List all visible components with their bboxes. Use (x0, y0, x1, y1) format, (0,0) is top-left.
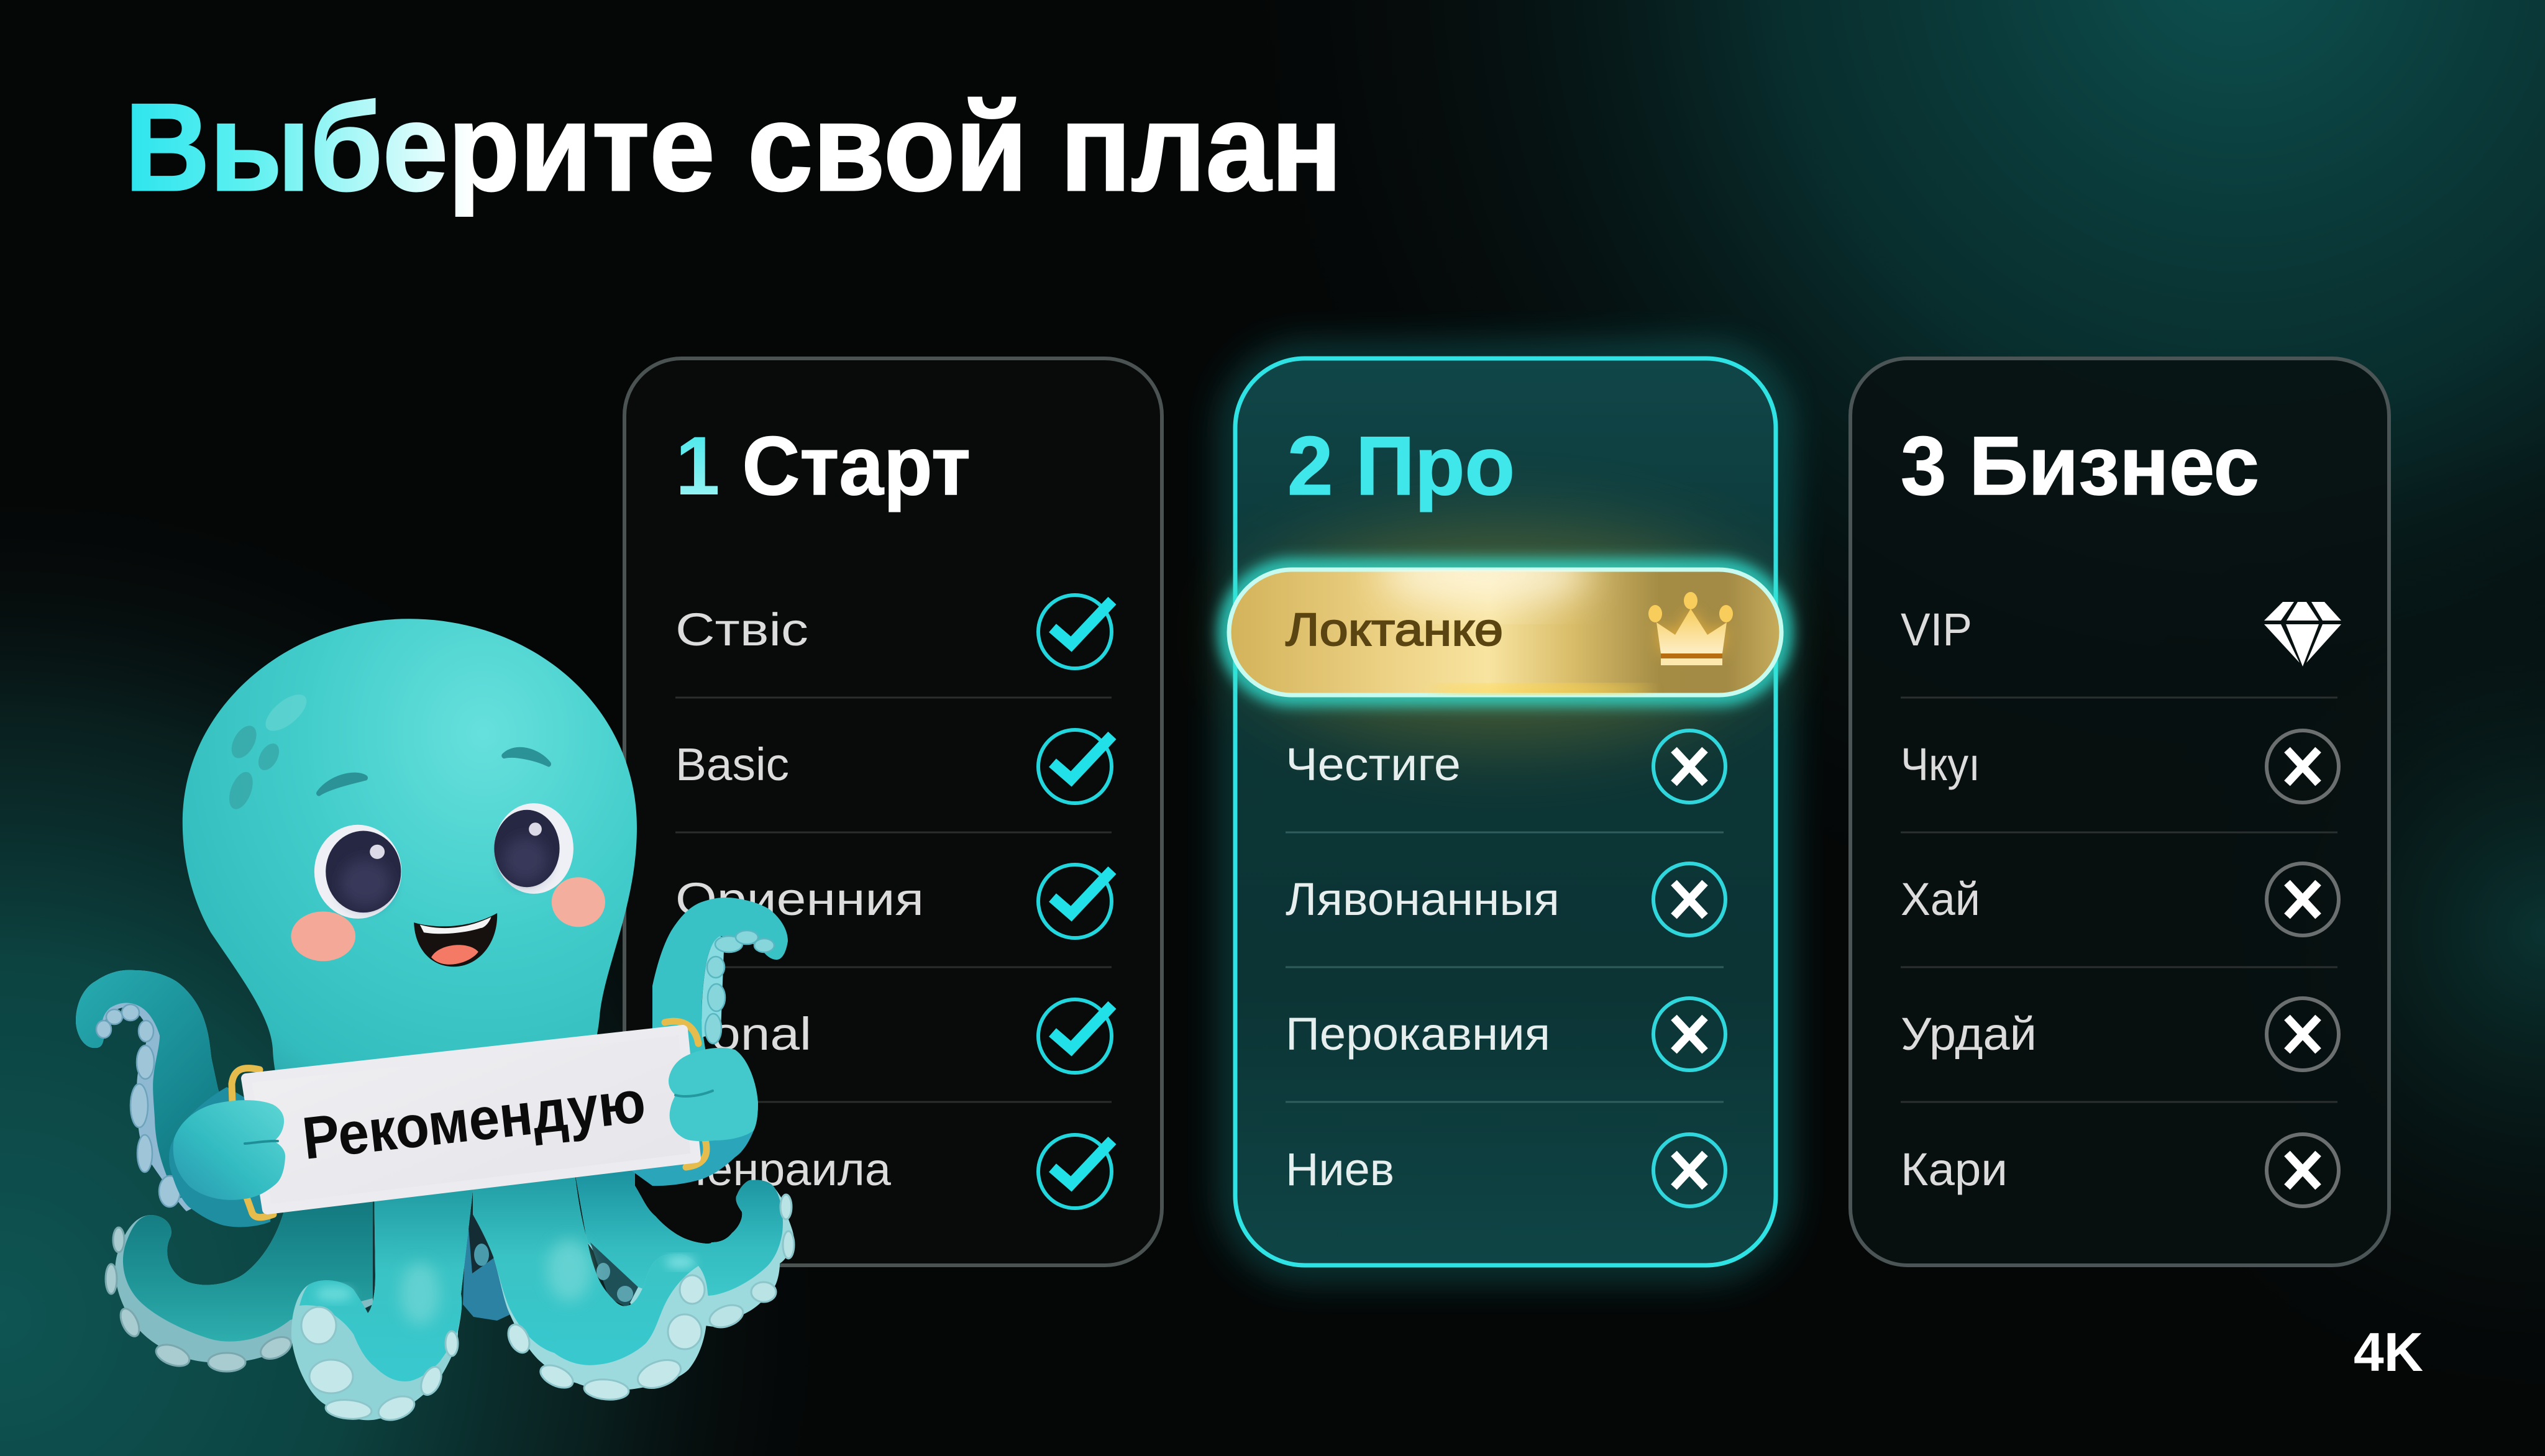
feature: Ченраила: Ченраила (675, 1144, 892, 1195)
icon: check 1 (1038, 595, 1112, 668)
title: Выберите свой план (125, 78, 1342, 217)
feature: Basic: Basic (675, 739, 789, 790)
4K badge: 4K (2354, 1321, 2423, 1383)
center right leg (473, 1168, 709, 1401)
heading: 3 Бизнес: 3 Бизнес (1901, 420, 2259, 512)
feature: Перокавния: Перокавния (1286, 1008, 1550, 1060)
icon: cross 3 (1653, 998, 1725, 1070)
right hand (669, 1048, 758, 1141)
icon: crown (1648, 592, 1733, 665)
center left leg (291, 1180, 474, 1424)
icon: diamond (2264, 602, 2341, 667)
feature: Урдай: Урдай (1901, 1008, 2037, 1060)
feature: Ствіс: Ствіс (675, 604, 808, 655)
icon: cross 4 (1653, 1134, 1725, 1206)
feature: Чкуı: Чкуı (1901, 739, 1980, 790)
sign board (246, 1030, 696, 1209)
icon: check 2 (1038, 730, 1112, 803)
icon: cross 1 (2267, 730, 2339, 803)
feature: Честиге: Честиге (1286, 739, 1461, 790)
icon: cross 2 (1653, 863, 1725, 935)
left hand (173, 1100, 285, 1200)
feature: VIP: VIP (1901, 604, 1972, 655)
mouth (414, 913, 497, 967)
upper left tentacle (76, 970, 249, 1211)
panel: pro plan (1227, 358, 1784, 1265)
eyebrows (319, 775, 365, 793)
row label: Локтанкө: Локтанкө (1286, 604, 1503, 655)
right arm (628, 1050, 758, 1186)
head and body (183, 619, 637, 1192)
upper right tentacle (652, 898, 788, 1068)
forehead spots (224, 688, 312, 813)
cheeks (291, 911, 355, 961)
sign text: Рекомендую (299, 1068, 649, 1172)
feature: Ниев: Ниев (1286, 1144, 1394, 1195)
lower left leg (106, 1199, 373, 1372)
panel: start plan (624, 358, 1162, 1265)
panel: business plan (1850, 358, 2389, 1265)
left arm (169, 1087, 280, 1227)
lower right leg (574, 1168, 794, 1332)
icon: cross 2 (2267, 863, 2339, 935)
icon: check 4 (1038, 999, 1112, 1073)
icon: check 3 (1038, 865, 1112, 938)
back dark legs (340, 1211, 516, 1321)
left eye (314, 825, 401, 919)
head and face (183, 619, 637, 1192)
octopus mascot (76, 619, 794, 1424)
heading: 1 Старт: 1 Старт (675, 420, 971, 512)
icon: check 5 (1038, 1135, 1112, 1208)
gold highlighted row (1227, 544, 1784, 698)
feature: Кари: Кари (1901, 1144, 2008, 1195)
heading: 2 Про: 2 Про (1287, 420, 1515, 512)
feature: Хай: Хай (1901, 873, 1980, 925)
icon: cross 3 (2267, 998, 2339, 1070)
feature: Лявонанныя: Лявонанныя (1286, 873, 1560, 925)
right eye (494, 803, 573, 894)
icon: cross 4 (2267, 1134, 2339, 1206)
icon: cross 1 (1653, 730, 1725, 803)
sign clips (232, 1021, 706, 1217)
feature: Ориенния: Ориенния (675, 873, 924, 925)
feature: Ponal: Ponal (675, 1008, 811, 1060)
